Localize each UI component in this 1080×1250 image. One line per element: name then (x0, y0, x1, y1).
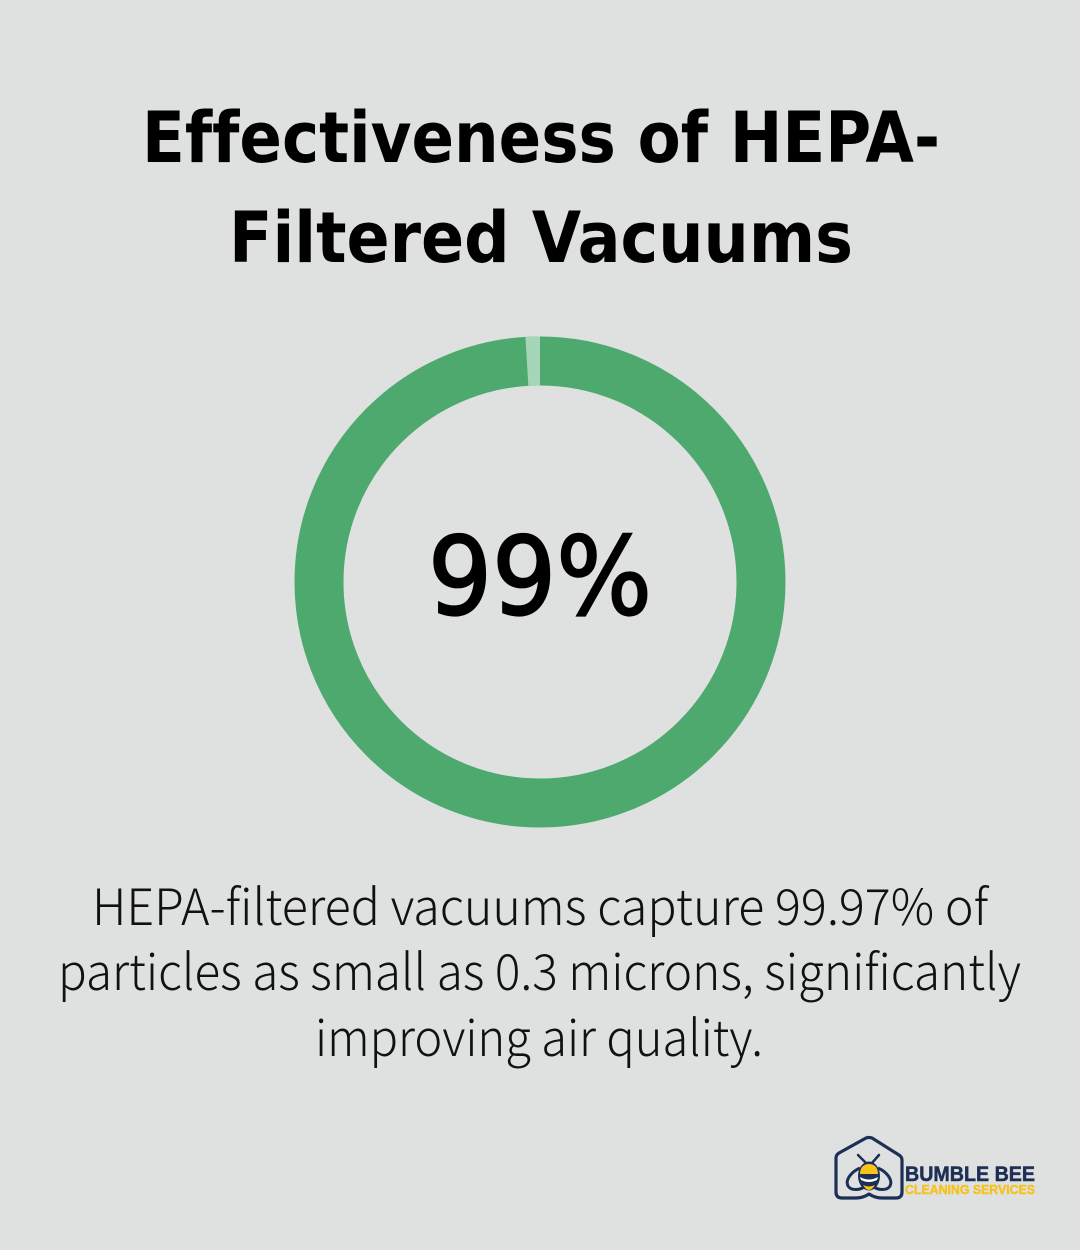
logo: Bumble Bee Cleaning Services (836, 1138, 1035, 1198)
description text: improving air quality. (315, 999, 763, 1071)
title (142, 97, 940, 279)
donut value: 99% (428, 515, 652, 640)
description text: particles as small as 0.3 microns, significantly (58, 933, 1021, 1005)
logo tagline: CLEANING SERVICES (905, 1183, 1035, 1197)
title: Filtered Vacuums (229, 197, 853, 279)
icon: house outline with bee (836, 1138, 902, 1198)
description text (58, 868, 1021, 1071)
logo name: BUMBLE BEE (905, 1163, 1035, 1186)
donut chart: 99% (319, 361, 761, 803)
title: Effectiveness of HEPA- (142, 97, 940, 179)
description text: HEPA-filtered vacuums capture 99.97% of (92, 868, 990, 940)
